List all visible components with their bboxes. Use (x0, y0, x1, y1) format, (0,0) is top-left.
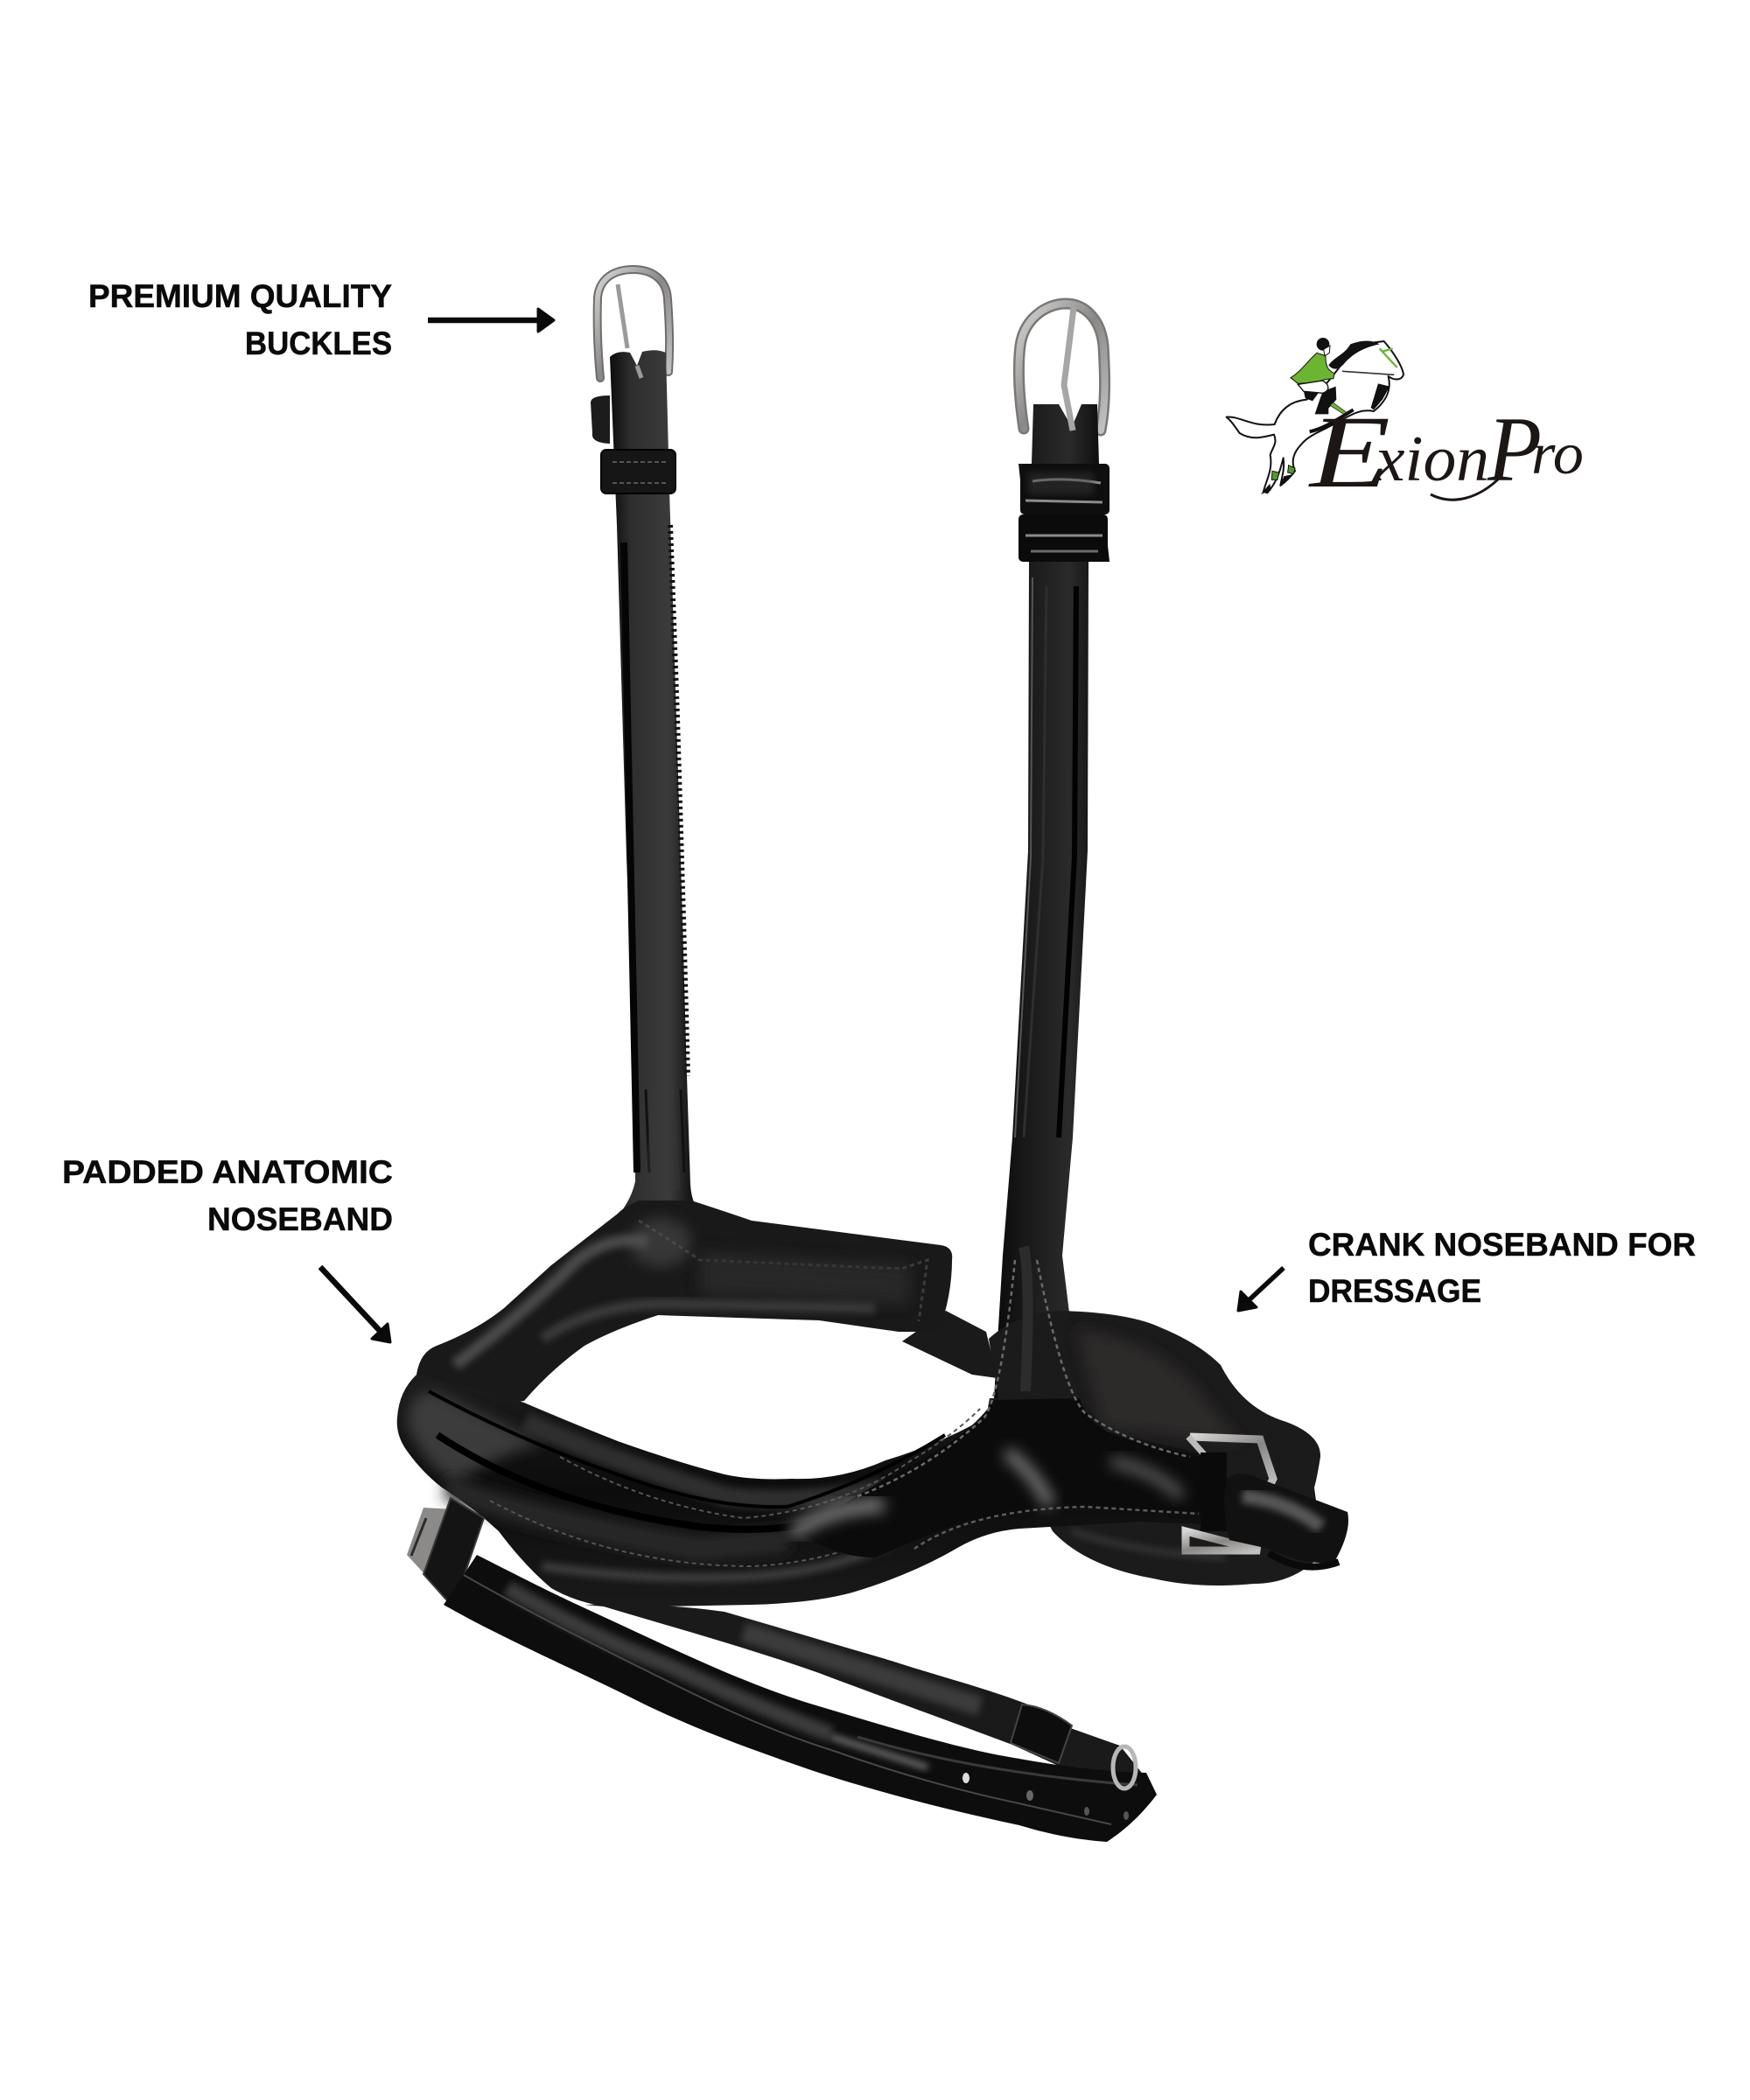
callout: crank noseband for dressage (1308, 1227, 1696, 1309)
chin strap lower band (444, 1555, 1157, 1842)
right keepers (1018, 464, 1110, 562)
chin strap end and keeper (407, 1498, 484, 1607)
logo wordmark (1307, 395, 1584, 509)
buckle loop (1224, 1474, 1348, 1567)
arrow: to padded noseband (320, 1267, 390, 1342)
logo: jumping horse and rider (1227, 338, 1404, 493)
callout: premium quality buckles: PREMIUM QUALITY (88, 278, 392, 314)
rear padded band and tab (416, 1200, 952, 1409)
left keeper (601, 450, 676, 494)
left cheek strap (591, 350, 695, 1216)
crank pad (989, 1311, 1323, 1586)
arrow: to buckle (428, 309, 554, 332)
callout: padded anatomic noseband: NOSEBAND (207, 1201, 393, 1237)
right cheek strap (994, 308, 1110, 1398)
logo wordmark: E (1307, 395, 1390, 509)
product: noseband (397, 270, 1348, 1842)
square buckle (1186, 1437, 1273, 1550)
logo wordmark: P (1487, 398, 1542, 500)
connecting strap under tab (902, 1311, 998, 1378)
left cheek buckle frame (598, 270, 669, 378)
ring and strap holes (962, 1746, 1136, 1820)
callout: crank noseband for dressage: DRESSAGE (1308, 1273, 1481, 1309)
callout: premium quality buckles (88, 278, 392, 361)
logo: ExionPro (1227, 338, 1584, 509)
callout: padded anatomic noseband: PADDED ANATOMIC (62, 1154, 393, 1190)
front padded noseband (397, 1375, 1208, 1607)
T junction shine and stitching (792, 1247, 1200, 1558)
logo wordmark: ro (1531, 420, 1584, 486)
callout: premium quality buckles: BUCKLES (245, 326, 392, 361)
logo wordmark: xion (1375, 424, 1489, 495)
callout: crank noseband for dressage: CRANK NOSEBAND FOR (1308, 1227, 1696, 1263)
arrow: to crank noseband (1238, 1268, 1284, 1311)
callout: padded anatomic noseband (62, 1154, 393, 1237)
right cheek buckle frame (1018, 304, 1105, 430)
chin strap tongue (584, 1604, 1144, 1785)
